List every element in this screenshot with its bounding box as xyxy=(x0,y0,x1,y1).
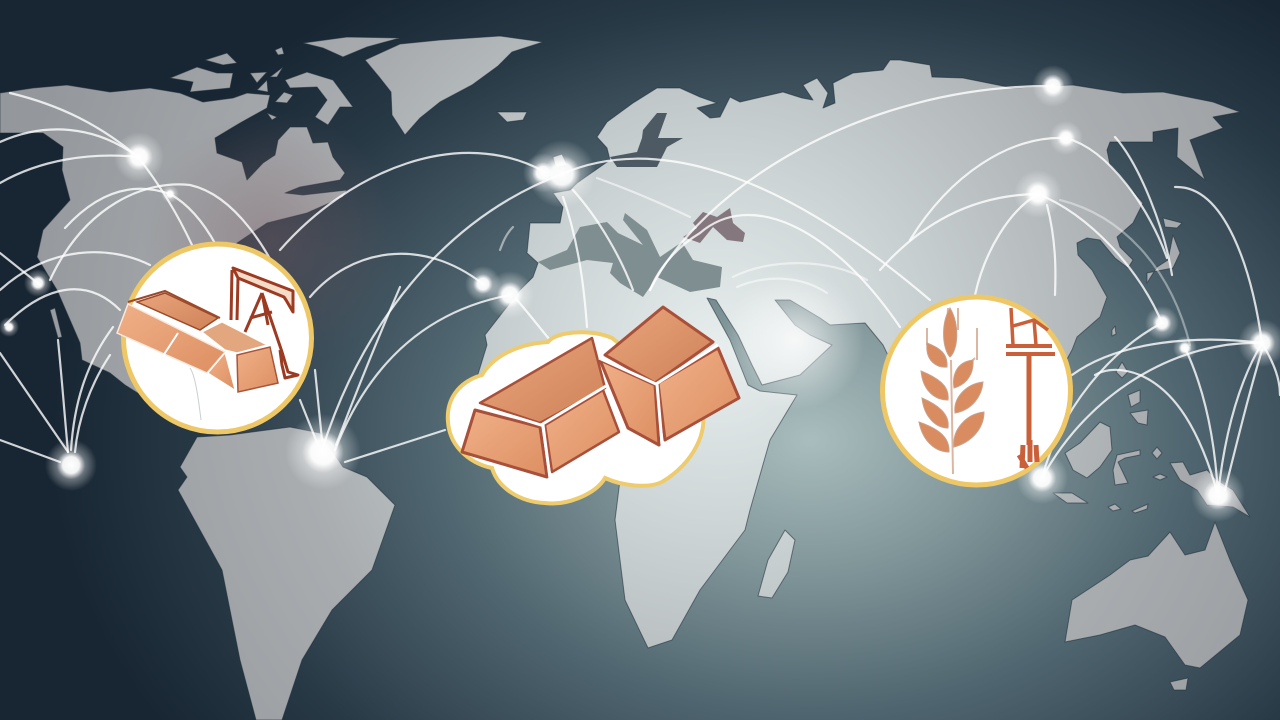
warm tint over North Atlantic xyxy=(140,110,410,370)
landmass: Iceland xyxy=(497,112,527,122)
badge circle xyxy=(124,244,312,432)
landmass: Southeast Asian islands xyxy=(1053,326,1250,517)
cloud shape xyxy=(448,332,703,503)
divider on side xyxy=(163,333,178,356)
Mediterranean Sea xyxy=(538,213,722,297)
ingot B right face xyxy=(658,348,739,440)
landmass: Japan xyxy=(1147,218,1182,283)
landmass: South America xyxy=(178,427,395,720)
icon: cloud with two copper ingots xyxy=(448,307,739,503)
icon: wheat and derrick badge xyxy=(882,297,1070,485)
copper bar long side xyxy=(117,304,225,373)
copper bar top xyxy=(137,293,218,330)
wheat leaves xyxy=(919,308,984,452)
ingot A left face xyxy=(462,410,547,477)
bright haze over Arabia xyxy=(725,270,865,410)
badge circle xyxy=(882,297,1070,485)
ingot B top xyxy=(605,307,713,383)
wheat stem and awns xyxy=(927,308,977,474)
landmass: Greenland xyxy=(365,36,543,135)
Black Sea xyxy=(683,208,745,243)
landmass: Baja peninsula xyxy=(50,308,62,338)
landmass: Arctic islands xyxy=(170,37,400,125)
landmass: Eurasia and Africa xyxy=(470,60,1240,648)
copper bar top outline xyxy=(128,291,220,318)
copper bar end xyxy=(208,353,235,390)
trade route arcs xyxy=(0,86,1280,495)
landmass: North America xyxy=(0,85,347,420)
icon: copper bar and oil pump badge xyxy=(117,244,312,432)
ingot A highlight xyxy=(476,386,606,478)
ingot A top xyxy=(480,338,605,423)
ingot B left face xyxy=(600,360,659,445)
glowing network nodes xyxy=(0,65,1280,522)
inland seas xyxy=(538,113,745,297)
oil pump jack xyxy=(231,268,298,378)
copper bar top end xyxy=(202,322,267,353)
Baltic Sea xyxy=(610,113,683,167)
landmass: Australia xyxy=(1065,522,1248,668)
copper bar front face xyxy=(237,347,278,392)
ingot B highlight xyxy=(599,345,718,444)
derrick xyxy=(1006,308,1055,468)
landmass: Britain xyxy=(553,154,567,168)
ingot A right face xyxy=(545,390,619,472)
landmass: Madagascar xyxy=(758,530,795,598)
hairline crack xyxy=(190,368,201,420)
landmass: Tasmania xyxy=(1170,678,1188,690)
